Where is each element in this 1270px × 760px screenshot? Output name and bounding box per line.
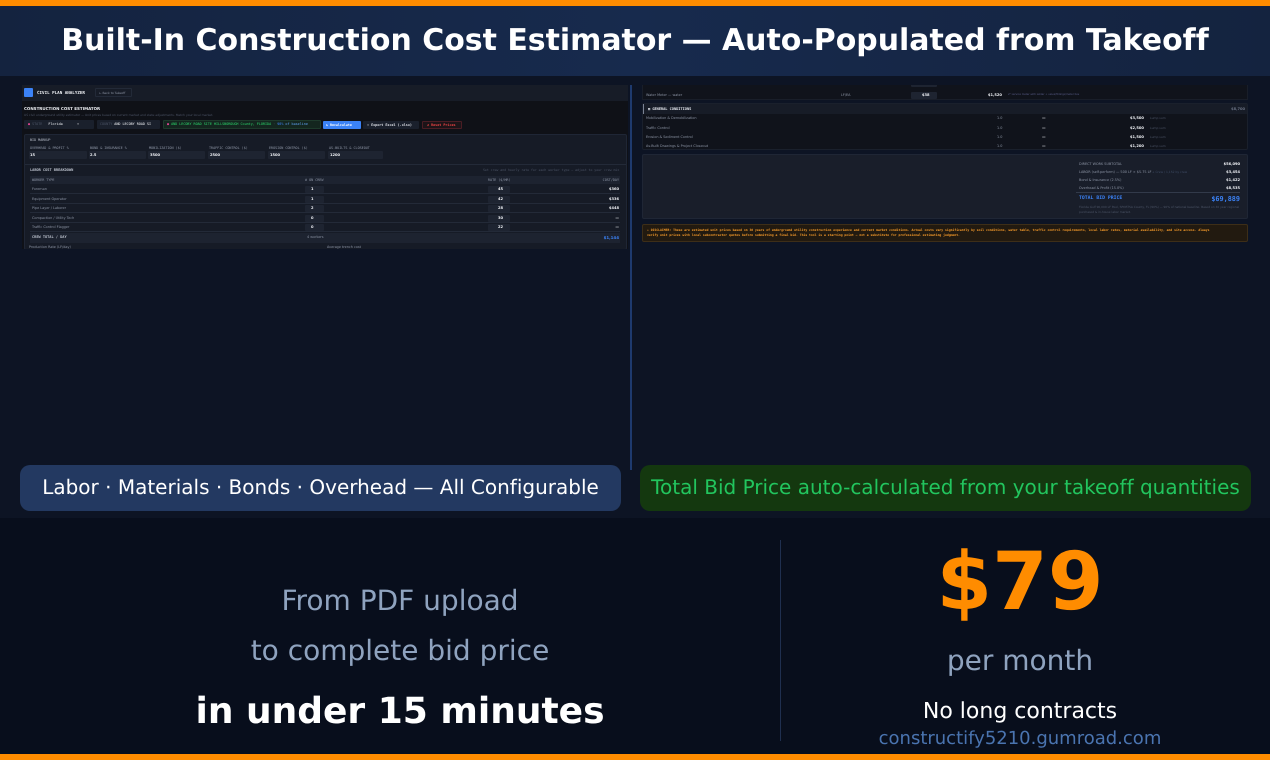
summary footnote: Florida Gulf 90,000 LF Pool, SPORTSA County, FL (90%) — 90% of national baseline. Based on 30 year regional xyxy=(1079,205,1239,209)
water section remnant: 2" service meter with setter + valve/fittings/meter box xyxy=(1008,92,1079,96)
bid summary card xyxy=(642,154,1248,219)
app top bar xyxy=(22,85,628,101)
bottom accent bar xyxy=(0,754,1270,760)
row: pipe layer: 2 xyxy=(311,206,314,210)
row: traffic flagger: — xyxy=(615,225,619,229)
table header: COST/DAY xyxy=(603,178,619,182)
disclaimer xyxy=(642,224,1248,242)
bid markup card: Average trench cost xyxy=(327,245,361,249)
row: compaction: — xyxy=(615,216,619,220)
estimator heading: CONSTRUCTION COST ESTIMATOR xyxy=(24,106,100,111)
caption: configurable costs: Labor · Materials · Bonds · Overhead — All Configurable xyxy=(42,475,599,499)
row: as-built: As-Built Drawings & Project Closeout xyxy=(646,144,708,148)
website: constructify5210.gumroad.com xyxy=(879,728,1161,749)
value statement xyxy=(195,584,605,732)
general conditions section xyxy=(642,103,1248,150)
markup fields xyxy=(29,146,383,159)
location badge: ● AND LECOBY ROAD SITE HILLSBOROUGH County, FLORIDA · 90% of baseline xyxy=(167,122,308,126)
row: as-built xyxy=(646,144,1166,148)
reset button xyxy=(422,121,462,129)
row: compaction: 0 xyxy=(311,216,314,220)
markup fields: 2500 xyxy=(210,152,220,156)
state selector: ● STATE Florida ▾ xyxy=(28,122,79,126)
bid summary card: $8,535 xyxy=(1226,186,1240,190)
caption: auto-calculated bid price: Total Bid Price auto-calculated from your takeoff quantities xyxy=(651,475,1240,499)
disclaimer: verify unit prices with local subcontractor quotes before submitting a final bid. This tool is a starting point — not a substitute for professional estimating judgment. xyxy=(647,233,960,237)
row: crew total xyxy=(30,233,620,243)
row: erosion: Lump sum xyxy=(1150,134,1166,138)
row: upper water row xyxy=(647,82,690,85)
recalculate button: ↻ Recalculate xyxy=(326,122,352,126)
bid summary card: $1,422 xyxy=(1226,178,1240,182)
back button: ← Back to Takeoff xyxy=(99,91,125,95)
row: mobilization: $3,500 xyxy=(1130,116,1144,120)
row: pipe layer xyxy=(30,204,620,213)
markup fields: 1500 xyxy=(270,152,280,156)
center divider xyxy=(630,85,632,470)
markup fields: EROSION CONTROL ($) xyxy=(269,146,308,150)
row: crew total: CREW TOTAL / DAY xyxy=(32,235,67,239)
markup fields: OVERHEAD & PROFIT % xyxy=(30,146,69,150)
labor table xyxy=(30,176,620,243)
row: foreman: 1 xyxy=(311,187,314,191)
county field: COUNTY AND LECOBY ROAD SI xyxy=(100,122,151,126)
markup fields: 1200 xyxy=(330,152,340,156)
row: traffic control: $2,500 xyxy=(1130,126,1144,130)
row: foreman: Foreman xyxy=(32,187,47,191)
markup fields: TRAFFIC CONTROL ($) xyxy=(209,146,248,150)
text: to complete bid price: to complete bid price xyxy=(251,634,549,667)
summary: labor: LABOR (self-perform) — 500 LF × $5.75 LF xyxy=(1079,170,1151,174)
caption: configurable costs xyxy=(20,465,621,511)
text: in under 15 minutes: in under 15 minutes xyxy=(195,691,605,732)
row: equipment operator: 1 xyxy=(311,196,314,200)
row: traffic control: Lump sum xyxy=(1150,126,1166,130)
export button: ⬇ Export Excel (.xlsx) xyxy=(367,122,412,126)
water section remnant: $38 xyxy=(922,92,930,96)
recalculate button xyxy=(323,121,361,129)
row: equipment operator: 42 xyxy=(498,196,503,200)
row: as-built: $1,200 xyxy=(1130,144,1144,148)
bottom band xyxy=(0,518,1270,754)
row: mobilization xyxy=(646,116,1166,120)
total bid price: TOTAL BID PRICE xyxy=(1079,196,1122,201)
table header: RATE ($/HR) xyxy=(488,178,510,182)
summary: overhead: Overhead & Profit (15.0%) xyxy=(1079,186,1124,190)
county field xyxy=(97,120,160,129)
row: as-built: 1.0 xyxy=(997,144,1002,148)
bid markup card xyxy=(24,134,627,250)
row: equipment operator xyxy=(30,194,620,204)
row: foreman: $360 xyxy=(609,187,619,191)
water section remnant: $1,520 xyxy=(988,92,1002,96)
panel: total bid price screenshot xyxy=(642,85,1248,242)
water section remnant xyxy=(642,85,1248,100)
labor cost breakdown heading: LABOR COST BREAKDOWN xyxy=(30,168,73,172)
row: foreman: 45 xyxy=(498,187,503,191)
row: mobilization: — xyxy=(1042,116,1046,120)
row: crew total: $1,144 xyxy=(604,235,619,240)
row: traffic control: — xyxy=(1042,126,1046,130)
row: pipe layer: 28 xyxy=(498,206,503,210)
app name: CIVIL PLAN ANALYZER xyxy=(37,90,85,94)
row: as-built: Lump sum xyxy=(1150,144,1166,148)
row: erosion: — xyxy=(1042,134,1046,138)
row: erosion: 1.0 xyxy=(997,134,1002,138)
row: traffic control: Traffic Control xyxy=(646,126,670,130)
row: traffic flagger: 0 xyxy=(311,225,314,229)
section header: $8,700 xyxy=(1231,106,1245,110)
markup fields: BOND & INSURANCE % xyxy=(90,146,127,150)
panel: cost estimator screenshot xyxy=(22,85,628,249)
no long contracts: No long contracts xyxy=(923,699,1117,724)
row: traffic control: 1.0 xyxy=(997,126,1002,130)
table header: WORKER TYPE xyxy=(32,178,54,182)
summary: bond: Bond & Insurance (2.5%) xyxy=(1079,178,1121,182)
water section remnant: LF/EA xyxy=(841,92,850,96)
row: compaction: 30 xyxy=(498,216,503,220)
row: erosion xyxy=(646,134,1166,138)
per month: per month xyxy=(947,644,1093,677)
bid summary card: + Crew / 1,152 by crew xyxy=(1152,170,1187,174)
export button xyxy=(363,121,419,129)
pricing block xyxy=(879,535,1161,749)
price: $79 xyxy=(936,535,1104,628)
back button xyxy=(95,88,132,97)
bid summary card: purchased & in-house labor market. xyxy=(1079,210,1131,214)
row: foreman xyxy=(30,185,620,194)
text: from pdf upload: From PDF upload xyxy=(281,584,519,617)
disclaimer: ⚠ DISCLAIMER: These are estimated unit prices based on 30 years of underground utility construction experience and current market conditions. Actual costs vary significantly by soil conditions, water table, traffic control requirements, local labor rates, material availability, and site access. Always xyxy=(647,228,1210,232)
title: Built-In Construction Cost Estimator — Auto-Populated from Takeoff xyxy=(61,23,1209,58)
row: traffic control xyxy=(646,126,1166,130)
row: equipment operator: Equipment Operator xyxy=(32,196,67,200)
row: compaction xyxy=(30,214,620,222)
row: crew total: 4 workers xyxy=(307,235,324,239)
row: mobilization: Lump sum xyxy=(1150,116,1166,120)
toolbar xyxy=(24,120,462,129)
bid summary card: $69,889 xyxy=(1211,195,1240,203)
summary: direct work: DIRECT WORK SUBTOTAL xyxy=(1079,162,1122,166)
row: traffic flagger: 22 xyxy=(498,225,503,229)
row: mobilization: 1.0 xyxy=(997,116,1002,120)
section header xyxy=(643,104,1247,114)
vertical divider xyxy=(780,540,781,741)
location badge xyxy=(163,120,321,129)
markup fields: 3500 xyxy=(150,152,160,156)
header band xyxy=(0,6,1270,76)
state selector xyxy=(24,120,94,129)
markup fields: 15 xyxy=(30,152,35,156)
main comparison area xyxy=(0,76,1270,518)
row: compaction: Compaction / Utility Tech xyxy=(32,216,74,220)
markup fields: 2.5 xyxy=(90,152,96,156)
icon: app logo xyxy=(24,88,33,97)
row: traffic flagger xyxy=(30,223,620,232)
bid summary card: $3,454 xyxy=(1226,170,1240,174)
reset button: ↺ Reset Prices xyxy=(427,123,456,127)
row: erosion: Erosion & Sediment Control xyxy=(646,134,693,138)
row: as-built: — xyxy=(1042,144,1046,148)
row: mobilization: Mobilization & Demobilization xyxy=(646,116,697,120)
row: equipment operator: $336 xyxy=(609,196,619,200)
top accent bar xyxy=(0,0,1270,6)
row: pipe layer: $448 xyxy=(609,206,619,210)
row: traffic flagger: Traffic Control Flagger xyxy=(32,225,69,229)
labor note: Set crew and hourly rate for each worker type — adjust to your crew mix xyxy=(483,168,619,172)
table header: # ON CREW xyxy=(305,178,323,182)
row: erosion: $1,500 xyxy=(1130,134,1144,138)
bid markup heading: BID MARKUP xyxy=(30,138,50,142)
bid summary card: $56,090 xyxy=(1224,162,1240,166)
row: pipe layer: Pipe Layer / Laborer xyxy=(32,206,66,210)
section header: ▣ GENERAL CONDITIONS xyxy=(648,106,691,110)
row: water meter: Water Meter — water xyxy=(646,92,682,96)
markup fields: MOBILIZATION ($) xyxy=(149,146,182,150)
production notes: Production Rate (LF/day) xyxy=(29,245,71,249)
markup fields: AS-BUILTS & CLOSEOUT xyxy=(329,146,370,150)
estimator subheading: US civil underground utility estimator — Unit prices based on current market and state adjustments. Match your local market. xyxy=(24,112,213,116)
table header xyxy=(30,176,620,184)
caption: auto-calculated bid price xyxy=(640,465,1251,511)
